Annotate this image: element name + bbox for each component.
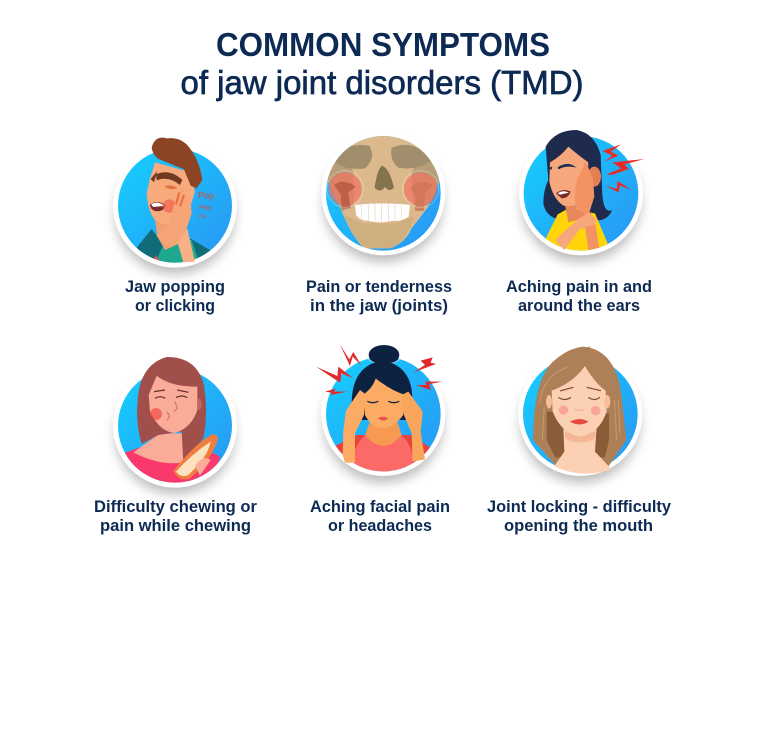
label xyxy=(487,497,672,535)
panel: jaw popping xyxy=(113,138,237,315)
label: in the jaw (joints) xyxy=(310,296,448,315)
panel: facial pain or headaches xyxy=(310,344,450,535)
label: opening the mouth xyxy=(504,516,653,535)
label: Joint locking - difficulty xyxy=(487,497,672,516)
icon: woman with headache xyxy=(316,344,445,482)
label: or clicking xyxy=(135,296,215,315)
title: of jaw joint disorders (TMD) xyxy=(180,64,584,101)
label: Pain or tenderness xyxy=(306,277,452,296)
label: pain while chewing xyxy=(100,516,251,535)
icon: woman holding ear xyxy=(519,130,644,262)
label: Difficulty chewing or xyxy=(94,497,257,516)
icon: man holding jaw: Pop xyxy=(198,190,214,200)
label xyxy=(94,497,257,535)
icon: man holding jaw xyxy=(113,138,237,274)
title xyxy=(180,26,584,101)
label: Aching pain in and xyxy=(506,277,652,296)
label xyxy=(125,277,225,315)
icon: skull with joints xyxy=(321,131,445,262)
panel: pain or tenderness xyxy=(306,131,452,315)
icon: woman with sore mouth xyxy=(518,346,642,482)
label: or headaches xyxy=(328,516,432,535)
icon: man holding jaw: Pop xyxy=(198,214,207,219)
icon: woman chewing xyxy=(113,357,237,494)
label xyxy=(506,277,652,315)
label xyxy=(310,497,450,535)
title: COMMON SYMPTOMS xyxy=(216,26,550,63)
label: around the ears xyxy=(518,296,640,315)
panel: difficulty chewing xyxy=(94,357,257,535)
label: Aching facial pain xyxy=(310,497,450,516)
panel: joint locking xyxy=(487,346,672,535)
icon: man holding jaw: Pop xyxy=(199,205,211,212)
label xyxy=(306,277,452,315)
label: Jaw popping xyxy=(125,277,225,296)
panel: aching ears xyxy=(506,130,652,315)
